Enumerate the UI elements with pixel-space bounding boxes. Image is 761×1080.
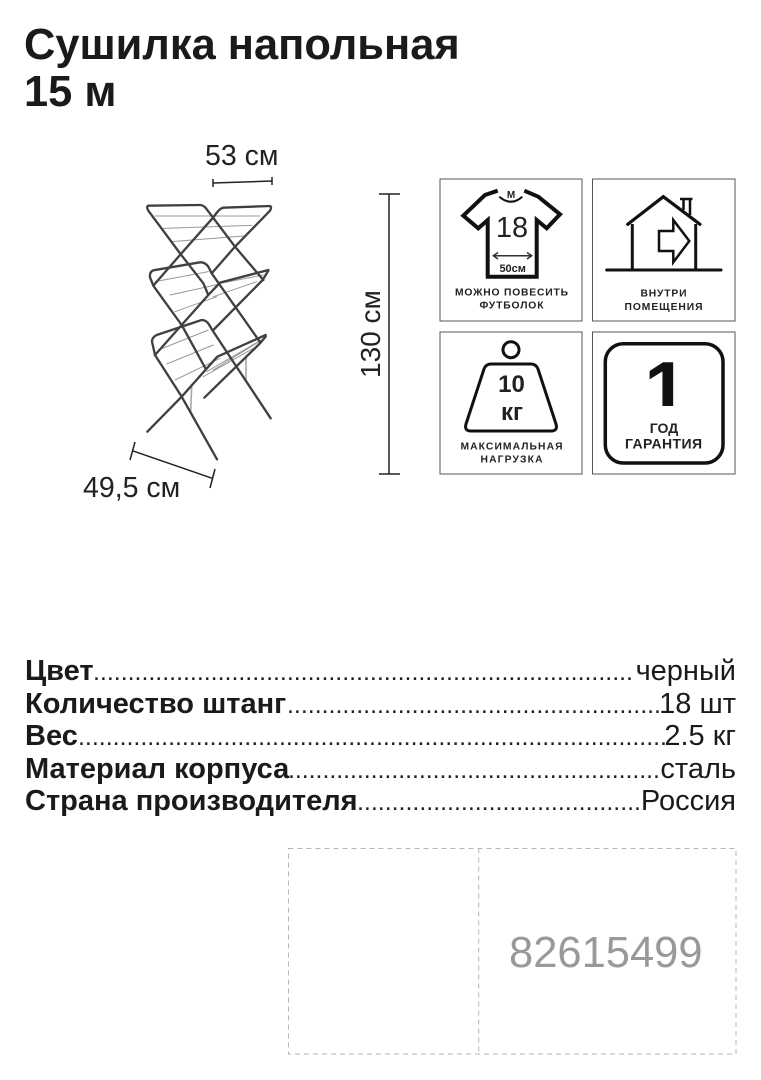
spec row: body material xyxy=(25,753,736,785)
dimension: height 130 cm: 130 см xyxy=(355,290,386,378)
caption: ПОМЕЩЕНИЯ xyxy=(624,302,702,313)
dimension: depth 49,5 cm xyxy=(83,442,215,504)
product diagram: floor dryer rack xyxy=(147,205,271,459)
dimension: width 53 cm xyxy=(205,140,278,187)
spec row: country of origin: Страна производителя xyxy=(25,785,358,817)
spec row: country of origin: Россия xyxy=(641,785,736,817)
icon: weight 10 kg xyxy=(466,342,556,431)
spec row: color: .............................................................................. xyxy=(93,658,633,686)
panel: t-shirt capacity xyxy=(440,179,582,321)
caption: НАГРУЗКА xyxy=(480,454,543,465)
icon: weight 10 kg: 10 xyxy=(498,371,525,398)
spec row: country of origin: ......................................... xyxy=(357,788,641,816)
spec row: color: черный xyxy=(636,655,736,687)
rack hanging wires xyxy=(155,216,263,418)
warranty badge xyxy=(605,344,723,463)
icon: t-shirt xyxy=(463,190,560,277)
caption xyxy=(460,442,562,465)
panel: maximum load xyxy=(440,332,582,474)
caption: ФУТБОЛОК xyxy=(480,300,544,312)
spec row: number of rods xyxy=(25,688,736,720)
spec row: body material: сталь xyxy=(660,753,736,785)
article number: 82615499 xyxy=(509,929,703,977)
icon: t-shirt: М xyxy=(507,190,515,201)
caption: ВНУТРИ xyxy=(640,289,686,300)
spec row: weight: 2.5 кг xyxy=(664,720,736,752)
title: 15 м xyxy=(24,68,116,116)
panel: one year warranty xyxy=(592,332,735,474)
title xyxy=(24,21,460,116)
caption xyxy=(624,289,702,313)
caption: МАКСИМАЛЬНАЯ xyxy=(460,442,562,453)
title: Сушилка напольная xyxy=(24,21,460,69)
rack frame xyxy=(147,205,271,459)
dashed label area xyxy=(288,848,736,1054)
warranty badge: 1 xyxy=(644,345,688,433)
dimension: depth 49,5 cm: 49,5 см xyxy=(83,472,180,504)
spec row: body material: ...................................................... xyxy=(288,756,660,784)
icon: weight 10 kg: кг xyxy=(501,399,523,426)
spec row: body material: Материал корпуса xyxy=(25,753,290,785)
warranty badge: ГАРАНТИЯ xyxy=(625,436,702,452)
icon: t-shirt: 50см xyxy=(499,263,526,275)
spec row: color: Цвет xyxy=(25,655,94,687)
spec row: number of rods: 18 шт xyxy=(659,688,736,720)
caption xyxy=(455,288,569,312)
panel: indoor use xyxy=(592,179,735,321)
spec row: weight: ..................................................................................... xyxy=(78,723,667,751)
spec row: number of rods: ...................................................... xyxy=(287,691,661,719)
warranty badge: ГОД xyxy=(650,420,678,436)
spec row: country of origin xyxy=(25,785,736,817)
spec row: weight: Вес xyxy=(25,720,78,752)
icon: t-shirt: 18 xyxy=(496,212,528,244)
dimension: width 53 cm: 53 см xyxy=(205,140,278,172)
spec row: color xyxy=(25,655,736,687)
spec row: number of rods: Количество штанг xyxy=(25,688,286,720)
specifications table xyxy=(25,655,736,817)
caption: МОЖНО ПОВЕСИТЬ xyxy=(455,288,569,299)
icon: house with arrow xyxy=(607,197,721,270)
dimension: height 130 cm xyxy=(355,194,400,474)
